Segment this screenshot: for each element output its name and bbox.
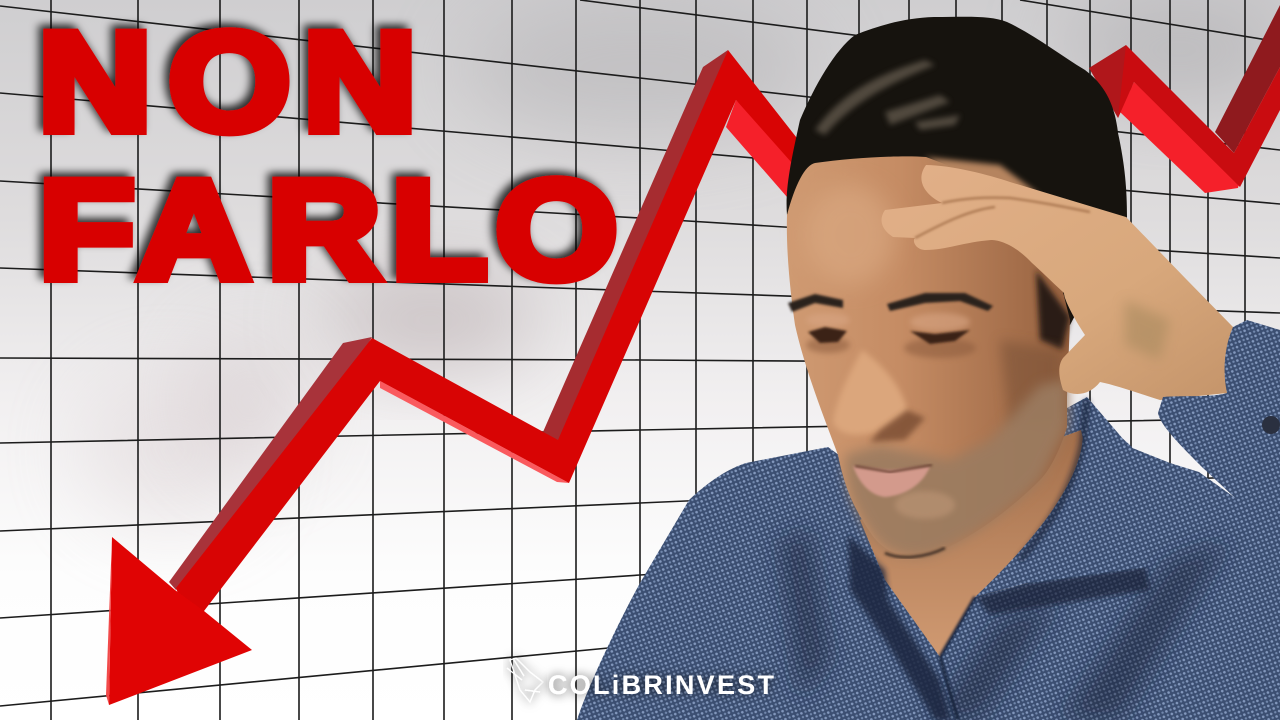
chin skin <box>895 491 955 519</box>
stubble <box>845 380 1067 557</box>
logo: Colibrinvest <box>507 658 774 702</box>
title line 2: FARLO <box>39 152 618 308</box>
right eyebrow <box>887 293 993 311</box>
title line 1: NON <box>38 4 417 160</box>
right eye <box>910 330 970 344</box>
neck <box>860 430 1090 657</box>
left collar shadow <box>848 535 950 720</box>
forehead skin patch <box>925 157 1040 195</box>
face <box>787 156 1070 557</box>
placket edge <box>940 597 975 720</box>
eyelids <box>806 313 970 331</box>
eye sockets <box>806 337 976 358</box>
person <box>577 17 1280 720</box>
shirt folds <box>780 530 1230 720</box>
collar shadow <box>975 567 1150 615</box>
hand <box>882 165 1233 400</box>
arrow side shading <box>169 5 1280 590</box>
forehead light <box>805 185 895 285</box>
arrow front face <box>176 50 800 625</box>
right collar <box>975 400 1146 597</box>
cuff button <box>1262 416 1280 434</box>
nose <box>833 350 907 435</box>
cheek shadow <box>1000 340 1062 430</box>
hand shading <box>1125 300 1170 360</box>
hair <box>787 17 1127 340</box>
logo wordmark: COLiBRINVEST <box>548 670 774 700</box>
left eye <box>808 327 847 343</box>
sleeve <box>1158 320 1280 540</box>
hair highlights <box>815 60 960 135</box>
shirt body <box>577 397 1280 720</box>
right arrow segment <box>1118 45 1280 187</box>
title: NON FARLO <box>38 4 618 308</box>
icon: hummingbird <box>507 658 543 702</box>
finger lines <box>915 198 1090 238</box>
sideburn <box>1036 270 1070 350</box>
lips <box>853 466 930 497</box>
left eyebrow <box>788 294 843 312</box>
arrow head <box>109 537 252 705</box>
collar neck shadow <box>1020 400 1087 560</box>
nose shadow <box>870 410 925 442</box>
jaw line <box>885 548 945 557</box>
